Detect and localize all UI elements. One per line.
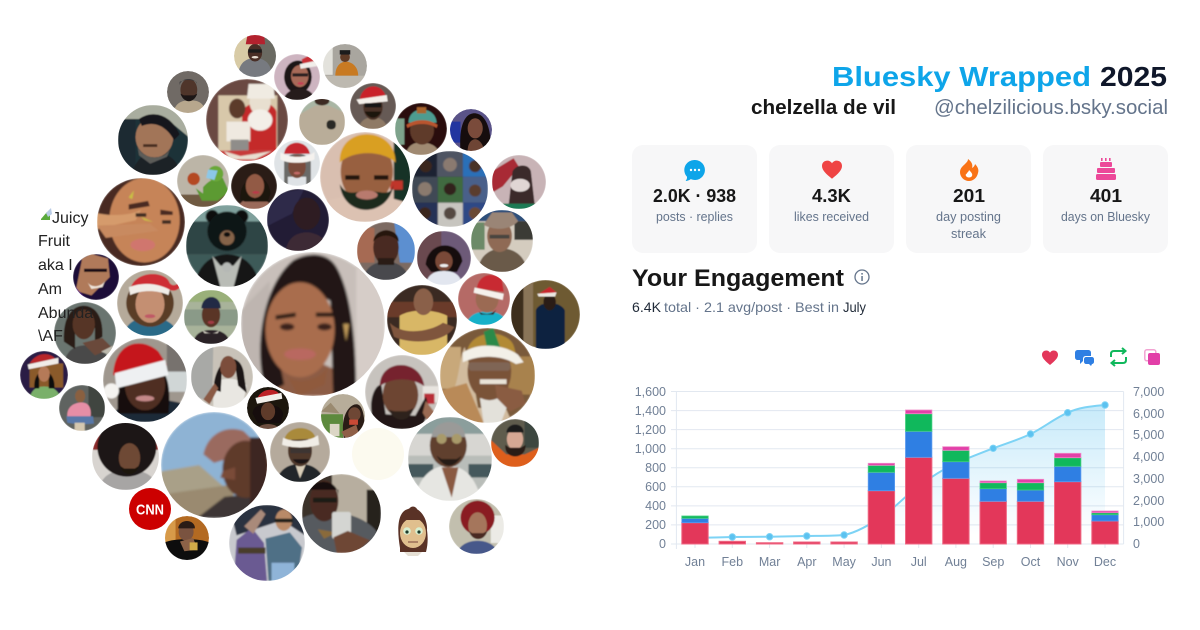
icon: legend replies xyxy=(1075,350,1094,366)
avatar: man with dreads xyxy=(54,302,116,364)
icon: legend quotes xyxy=(1145,350,1160,365)
month labels: Mar xyxy=(759,555,780,569)
avatar: man in glasses purple light xyxy=(73,254,119,300)
stacked bar and line chart xyxy=(635,385,1164,569)
title: 2025 xyxy=(1100,61,1167,92)
right axis labels: 1,000 xyxy=(1133,515,1164,529)
icon: legend heart xyxy=(1042,350,1058,365)
avatar: muscular man yellow shirt xyxy=(387,285,457,355)
avatar: selfie in orange jacket xyxy=(323,44,367,88)
left axis labels: 400 xyxy=(645,499,666,513)
avatar: blank cream circle xyxy=(352,428,404,480)
left axis labels: 800 xyxy=(645,461,666,475)
avatar: man in yellow beanie xyxy=(320,132,410,222)
month labels: Oct xyxy=(1021,555,1041,569)
panel: posts and replies: posts · replies xyxy=(656,210,733,224)
panel: likes received xyxy=(769,145,894,253)
avatar: man with santa hat and shades xyxy=(350,83,396,129)
avatar: outdoor woman with drink xyxy=(321,394,365,438)
month labels: May xyxy=(832,555,857,569)
avatar: CNN logo: CNN xyxy=(136,502,164,518)
avatar: woman in white top xyxy=(191,346,253,408)
broken image alt text: \AF xyxy=(38,328,63,345)
avatar: man in black cap in car xyxy=(118,105,188,175)
avatar: small person with gold xyxy=(165,516,209,560)
panel: day posting streak xyxy=(906,145,1031,253)
cumulative area xyxy=(695,405,1105,544)
panel: days on Bluesky xyxy=(1043,145,1168,253)
avatar: child with santa xyxy=(206,79,288,161)
right axis labels: 5,000 xyxy=(1133,428,1164,442)
panel: posts and replies: 2.0K · 938 xyxy=(653,185,736,206)
avatar: meme collage grid xyxy=(412,151,488,227)
left axis labels: 1,400 xyxy=(635,404,666,418)
panel: likes received: 4.3K xyxy=(812,185,852,206)
title xyxy=(832,61,1167,92)
month labels: Jun xyxy=(871,555,892,569)
month labels: Jul xyxy=(911,555,927,569)
avatar: teal cap woman xyxy=(395,103,447,155)
icon: chat bubble xyxy=(684,160,705,181)
avatar: man in hoodie outdoors xyxy=(357,222,415,280)
broken image alt text: Abunda xyxy=(38,305,93,322)
avatar: man with kente santa hat xyxy=(270,422,330,482)
avatar: man with hat and plaid shirt xyxy=(471,210,533,272)
avatar cluster xyxy=(20,35,580,581)
right axis labels: 2,000 xyxy=(1133,494,1164,508)
reposts bars xyxy=(682,414,1118,518)
avatar: woman in car xyxy=(231,163,277,209)
panel: day posting streak: day posting xyxy=(936,210,1001,224)
month labels: Apr xyxy=(797,555,817,569)
likes bars xyxy=(682,457,1118,544)
engagement summary: 6.4K xyxy=(632,299,662,315)
avatar: main profile woman xyxy=(241,252,385,396)
avatar: man with red hair xyxy=(449,499,504,554)
engagement summary: July xyxy=(843,299,866,315)
avatar: woman with red object xyxy=(492,155,546,209)
avatar: man in maroon beanie xyxy=(365,355,439,429)
avatar: bearded man xyxy=(167,71,209,113)
avatar: man with afro xyxy=(92,423,159,490)
avatar: woman with santa hat and glasses xyxy=(274,54,320,100)
month labels xyxy=(685,555,1116,569)
engagement summary: total · 2.1 avg/post · Best in xyxy=(664,299,839,315)
broken image alt text: Fruit xyxy=(38,233,71,250)
avatar: man santa hat in teal shirt xyxy=(458,273,510,325)
avatar: woman santa hat grey hair xyxy=(274,140,320,186)
avatar: man in kente hat xyxy=(440,328,535,423)
panel: posts and replies xyxy=(632,145,757,253)
avatar: kermit sipping xyxy=(177,155,229,207)
right axis labels: 7,000 xyxy=(1133,385,1164,399)
left axis labels xyxy=(635,385,666,551)
broken image alt text: aka I xyxy=(38,257,73,274)
avatar: dark shadowed man xyxy=(267,189,329,251)
avatar: raiders shirt xyxy=(299,99,345,145)
panel: day posting streak: 201 xyxy=(953,185,985,206)
avatar: action figures xyxy=(229,505,305,581)
avatar: small woman santa hat xyxy=(247,387,289,429)
cumulative line xyxy=(695,405,1105,538)
quotes bars xyxy=(868,410,1118,513)
right axis labels: 6,000 xyxy=(1133,407,1164,421)
panel: likes received: likes received xyxy=(794,210,869,224)
avatar: woman with tree and sky xyxy=(161,412,267,518)
icon: cake xyxy=(1096,158,1116,180)
panel: days on Bluesky: 401 xyxy=(1090,185,1122,206)
avatar: CNN logo xyxy=(129,488,171,530)
left axis labels: 1,200 xyxy=(635,423,666,437)
right axis labels: 4,000 xyxy=(1133,450,1164,464)
avatar: smiling child xyxy=(417,231,471,285)
panel: days on Bluesky: days on Bluesky xyxy=(1061,210,1151,224)
avatar: bitmoji xyxy=(398,506,428,556)
left axis labels: 0 xyxy=(659,537,666,551)
left axis labels: 200 xyxy=(645,518,666,532)
broken image alt text: Am xyxy=(38,281,62,298)
avatar: woman long dark hair xyxy=(450,109,492,151)
avatar: dark gold wall xyxy=(511,280,580,349)
profile name and handle: chelzella de vil xyxy=(751,97,896,119)
avatar: selfie with phone xyxy=(302,474,381,553)
avatar: person in pink shirt xyxy=(59,385,105,431)
broken image alt text: Juicy xyxy=(52,210,88,227)
left axis labels: 1,000 xyxy=(635,442,666,456)
avatar: man in white shirt and gold glasses xyxy=(408,417,492,501)
month labels: Dec xyxy=(1094,555,1116,569)
avatar: curly hair woman santa hat xyxy=(117,270,183,336)
avatar: man with big santa hat xyxy=(103,338,187,422)
right axis labels: 3,000 xyxy=(1133,472,1164,486)
avatar: man with red hat xyxy=(234,35,276,77)
profile name and handle: @chelzilicious.bsky.social xyxy=(934,97,1168,119)
month labels: Sep xyxy=(982,555,1004,569)
icon: flame xyxy=(960,159,978,181)
right axis labels: 0 xyxy=(1133,537,1140,551)
panel: day posting streak: streak xyxy=(951,227,987,241)
line points xyxy=(729,402,1108,540)
replies bars xyxy=(682,431,1118,523)
avatar: man in navy cap with chain xyxy=(184,290,238,344)
left axis labels: 1,600 xyxy=(635,385,666,399)
month labels: Nov xyxy=(1057,555,1080,569)
title: Bluesky Wrapped xyxy=(832,61,1091,92)
heading: your engagement: Your Engagement xyxy=(632,265,844,292)
icon: info xyxy=(855,270,869,284)
profile name and handle xyxy=(751,97,1168,119)
avatar: bear in leather jacket xyxy=(186,205,268,287)
avatar: man with orange shirt and beard xyxy=(491,419,539,467)
icon: legend reposts xyxy=(1111,348,1126,366)
month labels: Feb xyxy=(722,555,743,569)
chart grid xyxy=(671,392,1124,549)
broken image alt text xyxy=(38,208,93,345)
month labels: Jan xyxy=(685,555,705,569)
right axis labels xyxy=(1133,385,1164,551)
chart legend icons xyxy=(1042,348,1160,366)
left axis labels: 600 xyxy=(645,480,666,494)
month labels: Aug xyxy=(945,555,967,569)
avatar: cartoon woman xyxy=(20,351,68,399)
icon: heart xyxy=(822,161,842,179)
avatar: woman with yellow nails xyxy=(97,178,185,266)
